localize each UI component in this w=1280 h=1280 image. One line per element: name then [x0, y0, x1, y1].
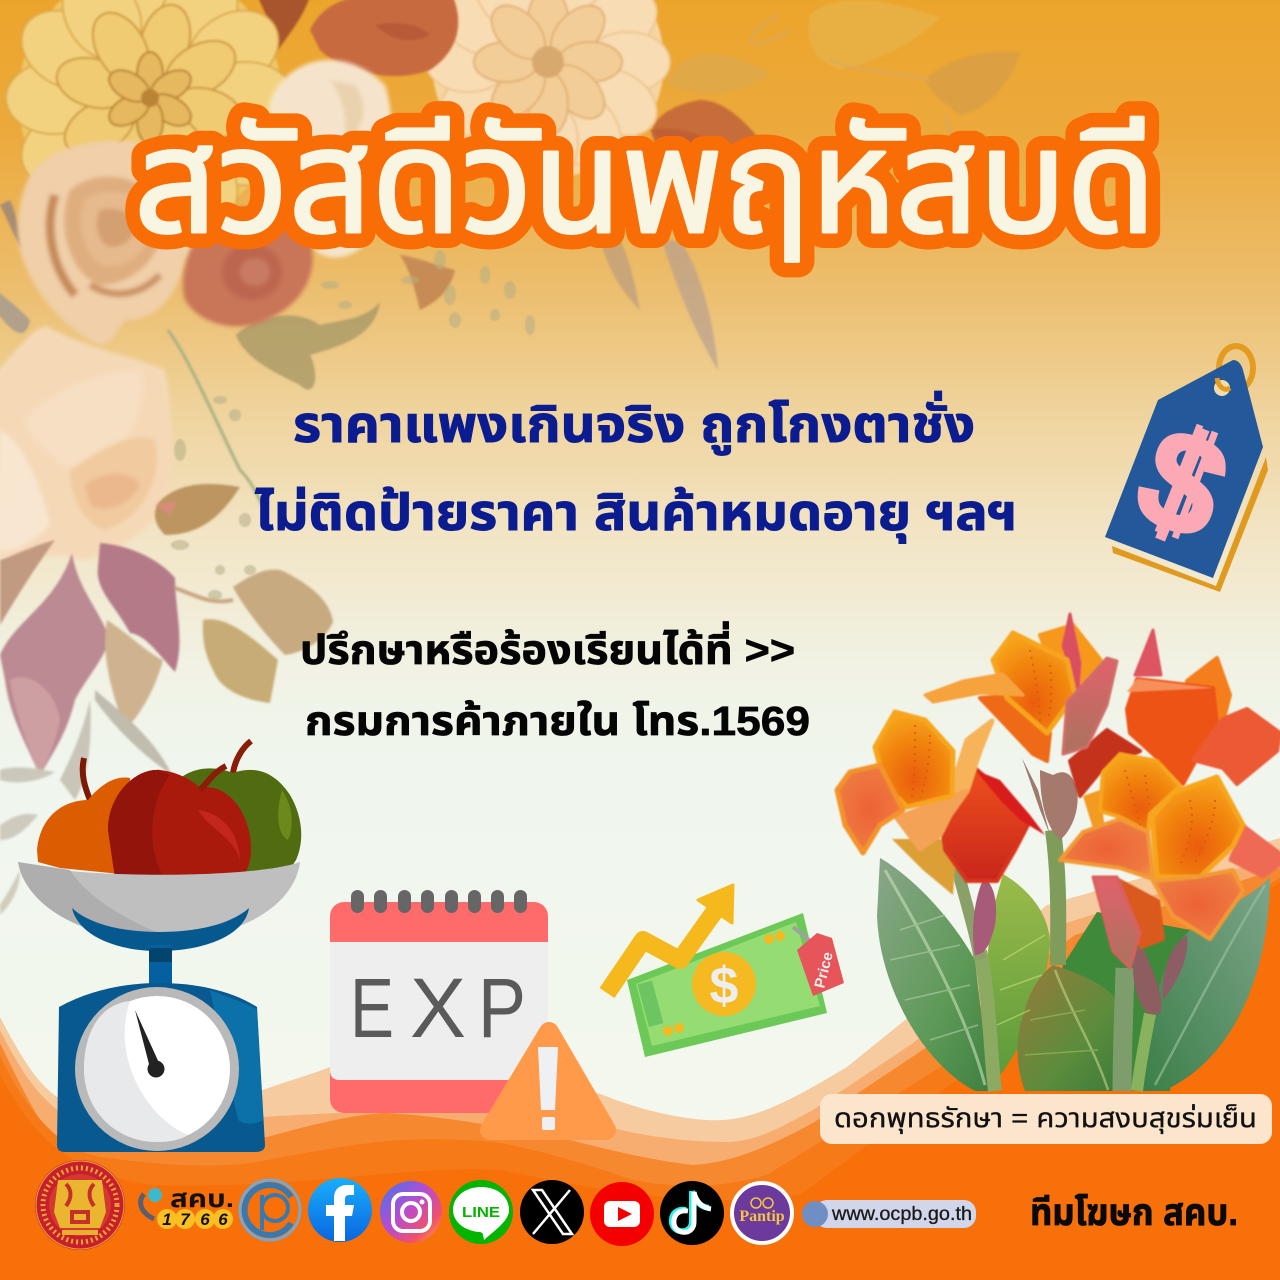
flower front right	[1060, 754, 1243, 968]
purple leaves	[0, 540, 333, 915]
petal speckles	[912, 650, 1215, 865]
icon: Pantip	[732, 1183, 792, 1243]
text block: contact: ปรึกษาหรือร้องเรียนได้ที่ >>	[300, 621, 795, 673]
red bud	[255, 0, 458, 76]
icon: Instagram	[380, 1181, 442, 1243]
website pill: www.ocpb.go.th	[831, 1204, 972, 1225]
dark red rose	[183, 207, 313, 326]
text block: contact	[300, 621, 810, 744]
icon: Pantip: Pantip	[739, 1208, 785, 1225]
apples	[37, 741, 301, 878]
icon: hotline 1766: 6	[218, 1210, 228, 1229]
leaves	[877, 858, 1270, 1091]
icon: rising price money: $	[710, 957, 739, 1015]
icon: EXP calendar: E	[350, 961, 394, 1055]
peach dahlia	[426, 0, 670, 184]
icon: rising price money	[607, 885, 844, 1057]
icon: hotline 1766: 7	[180, 1210, 191, 1229]
icon: YouTube	[590, 1182, 654, 1246]
yellow dahlia	[6, 0, 294, 242]
text block: contact: กรมการค้าภายใน โทร.1569	[305, 698, 810, 744]
buds	[973, 758, 1187, 1014]
price label	[793, 927, 815, 945]
icon: rising price money: Price	[811, 950, 837, 990]
icon: LINE: LINE	[462, 1204, 500, 1221]
title: สวัสดีวันพฤหัสบดี	[134, 100, 1156, 263]
speckled foliage	[171, 250, 535, 600]
icon: price tag	[1105, 346, 1268, 592]
top right autumn leaves	[600, 0, 1020, 370]
icon: price tag: $	[1116, 395, 1249, 572]
side leaves	[0, 200, 455, 505]
icon: EXP calendar	[330, 890, 606, 1130]
caption: flower meaning: ดอกพุทธรักษา = ความสงบสุขร่มเย็น	[834, 1103, 1257, 1134]
flower left	[837, 712, 1045, 895]
icon: apples on scale	[18, 741, 301, 1152]
icon: X	[520, 1180, 584, 1244]
team credit: ทีมโฆษก สคบ.	[1030, 1192, 1238, 1233]
text block: complaint topics: ราคาแพงเกินจริง ถูกโกงตาชั่ง	[293, 391, 975, 456]
icon: EXP calendar: P	[478, 961, 526, 1055]
flower right back	[1070, 630, 1280, 877]
title: สวัสดีวันพฤหัสบดี	[134, 100, 1156, 263]
cream rose	[269, 60, 392, 257]
stem and bud	[155, 484, 240, 535]
icon: OCPB ring logo	[240, 1180, 300, 1240]
needle	[135, 1010, 160, 1068]
text block: complaint topics	[255, 391, 1017, 543]
bowl	[18, 862, 300, 940]
icon: hotline 1766	[141, 1185, 234, 1229]
icon: hotline 1766: 6	[200, 1210, 210, 1229]
icon: EXP calendar: X	[410, 961, 466, 1055]
scale body	[57, 983, 265, 1152]
flower top	[925, 614, 1117, 761]
icon: OCPB seal	[35, 1160, 125, 1250]
warning triangle	[490, 1032, 606, 1130]
text block: complaint topics: ไม่ติดป้ายราคา สินค้าหมดอายุ ฯลฯ	[255, 484, 1017, 543]
scale neck	[72, 908, 249, 951]
icon: Facebook	[308, 1178, 372, 1242]
peach rose	[0, 327, 172, 559]
stems	[955, 830, 1150, 1091]
illustration: canna lily flowers	[837, 614, 1280, 1091]
website pill	[802, 1200, 976, 1228]
brown rose	[18, 141, 199, 345]
icon: hotline 1766: 1	[162, 1210, 172, 1229]
icon: TikTok	[660, 1181, 724, 1245]
caption: flower meaning	[820, 1094, 1272, 1144]
icon: LINE	[449, 1180, 513, 1244]
icon: hotline 1766: สคบ.	[170, 1185, 234, 1213]
footer logo row	[35, 1160, 976, 1250]
orange waves footer	[0, 838, 1280, 1280]
watercolor floral decoration	[0, 0, 1020, 915]
